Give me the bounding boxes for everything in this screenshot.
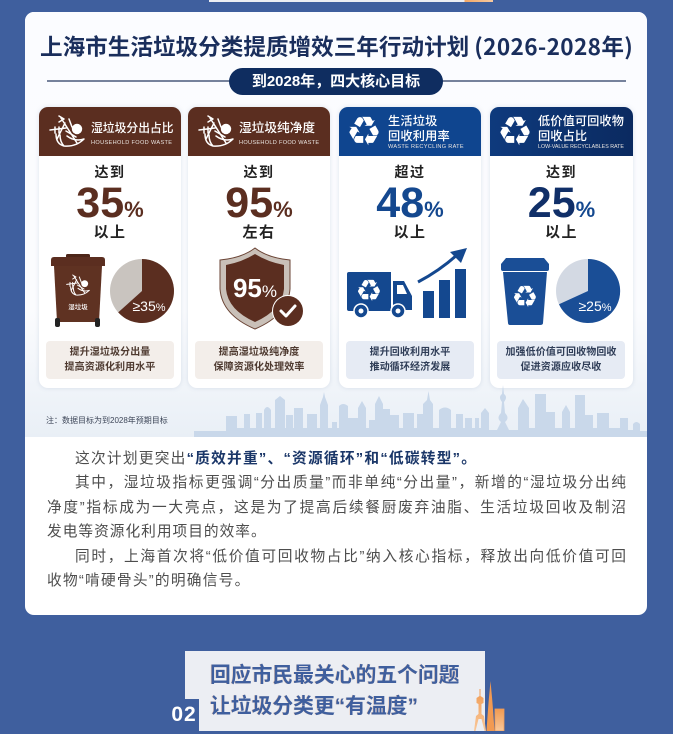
skyline	[194, 386, 647, 437]
section banner 02	[171, 651, 504, 731]
icon: blue bin	[501, 258, 549, 325]
infographic background	[25, 12, 647, 437]
panel: waste recycling rate	[339, 107, 481, 388]
header title: 回收占比	[538, 129, 587, 143]
icon: shield with check: 95%	[233, 273, 277, 303]
panel: food waste purity	[188, 107, 330, 388]
target lead: 达到	[94, 164, 126, 180]
panel: low value recyclables share	[490, 107, 633, 388]
header title: 生活垃圾	[388, 114, 438, 128]
panel header	[39, 107, 181, 156]
section number box: 02	[171, 703, 197, 726]
target suffix: 以上	[93, 224, 126, 241]
description	[497, 341, 625, 379]
icon: recycling truck	[347, 272, 412, 318]
icon: brown bin	[51, 254, 105, 327]
text block: analysis	[47, 450, 627, 589]
title: 上海市生活垃圾分类提质增效三年行动计划(2026-2028年)	[40, 29, 633, 62]
target value: 48%	[376, 179, 444, 227]
text block: analysis: 发电等资源化利用项目的效率。	[47, 524, 267, 540]
target suffix: 以上	[545, 224, 578, 241]
target lead: 达到	[244, 164, 274, 180]
target lead: 超过	[394, 164, 426, 180]
main card	[25, 12, 647, 615]
panel: household food waste share	[39, 107, 181, 388]
banner heading: 让垃圾分类更“有温度”	[210, 695, 418, 718]
pie chart: 35%	[110, 259, 174, 323]
icon: recycling truck: ♻	[356, 274, 382, 309]
panel header	[188, 107, 330, 156]
banner heading: 回应市民最关心的五个问题	[210, 664, 460, 687]
icon: shield with check	[220, 248, 303, 330]
text block: analysis: 净度”指标成为一大亮点，这是为了提高后续餐厨废弃油脂、生活垃圾回收及制沼	[47, 500, 627, 516]
description: 促进资源应收尽收	[521, 362, 601, 373]
target value: 95%	[225, 179, 293, 227]
pie chart: 25%	[556, 259, 620, 323]
panel header	[490, 107, 633, 156]
target value: 25%	[528, 179, 595, 227]
description: 推动循环经济发展	[370, 362, 450, 373]
section number box	[169, 699, 199, 731]
header title	[388, 114, 450, 143]
header english: WASTE RECYCLING RATE	[388, 144, 464, 150]
divider line	[47, 80, 626, 82]
text block: analysis: 同时，上海首次将“低价值可回收物占比”纳入核心指标，释放出向低价值可回	[75, 549, 627, 565]
header title: 湿垃圾分出占比	[91, 121, 174, 135]
header english: HOUSEHOLD FOOD WASTE	[91, 140, 172, 146]
target suffix: 以上	[393, 224, 426, 241]
header title: 湿垃圾纯净度	[239, 121, 315, 135]
icon: blue bin: ♻	[512, 280, 538, 315]
description: 加强低价值可回收物回收	[505, 346, 617, 358]
target value: 35%	[76, 179, 144, 227]
bar chart with rising arrow	[417, 248, 467, 318]
icon: food waste	[198, 115, 234, 147]
pie chart: 35%: ≥35%	[132, 298, 166, 314]
description: 提升湿垃圾分出量	[70, 346, 150, 358]
icon: orange towers	[474, 682, 504, 731]
description	[195, 341, 323, 379]
description	[46, 341, 174, 379]
target suffix: 左右	[242, 224, 276, 241]
icon: food waste	[49, 115, 85, 147]
text block: analysis: 这次计划更突出“质效并重”、“资源循环”和“低碳转型”。	[75, 451, 477, 467]
text block: analysis: 收物“啃硬骨头”的明确信号。	[47, 573, 251, 589]
description	[346, 341, 474, 379]
header title	[538, 114, 624, 143]
text block: analysis: 其中，湿垃圾指标更强调“分出质量”而非单纯“分出量”，新增的“湿垃圾分出纯	[75, 475, 627, 491]
top section strip	[209, 0, 493, 2]
icon: brown bin: 湿垃圾	[68, 302, 88, 311]
header title: 回收利用率	[388, 129, 450, 143]
subtitle pill: 到2028年，四大核心目标	[252, 73, 420, 90]
description: 保障资源化处理效率	[214, 362, 304, 373]
header english: LOW-VALUE RECYCLABLES RATE	[538, 144, 624, 150]
description: 提高资源化利用水平	[65, 362, 155, 373]
header title: 低价值可回收物	[538, 114, 624, 128]
subtitle pill	[229, 68, 443, 95]
banner background	[185, 651, 485, 731]
target lead: 达到	[546, 164, 577, 180]
header english: HOUSEHOLD FOOD WASTE	[239, 140, 319, 146]
pie chart: 25%: ≥25%	[578, 298, 612, 314]
description: 提升回收利用水平	[370, 346, 450, 358]
description: 提高湿垃圾纯净度	[219, 346, 299, 358]
panel header	[339, 107, 481, 156]
banner heading	[210, 664, 460, 718]
footnote: 注：数据目标为到2028年预期目标	[46, 416, 168, 425]
